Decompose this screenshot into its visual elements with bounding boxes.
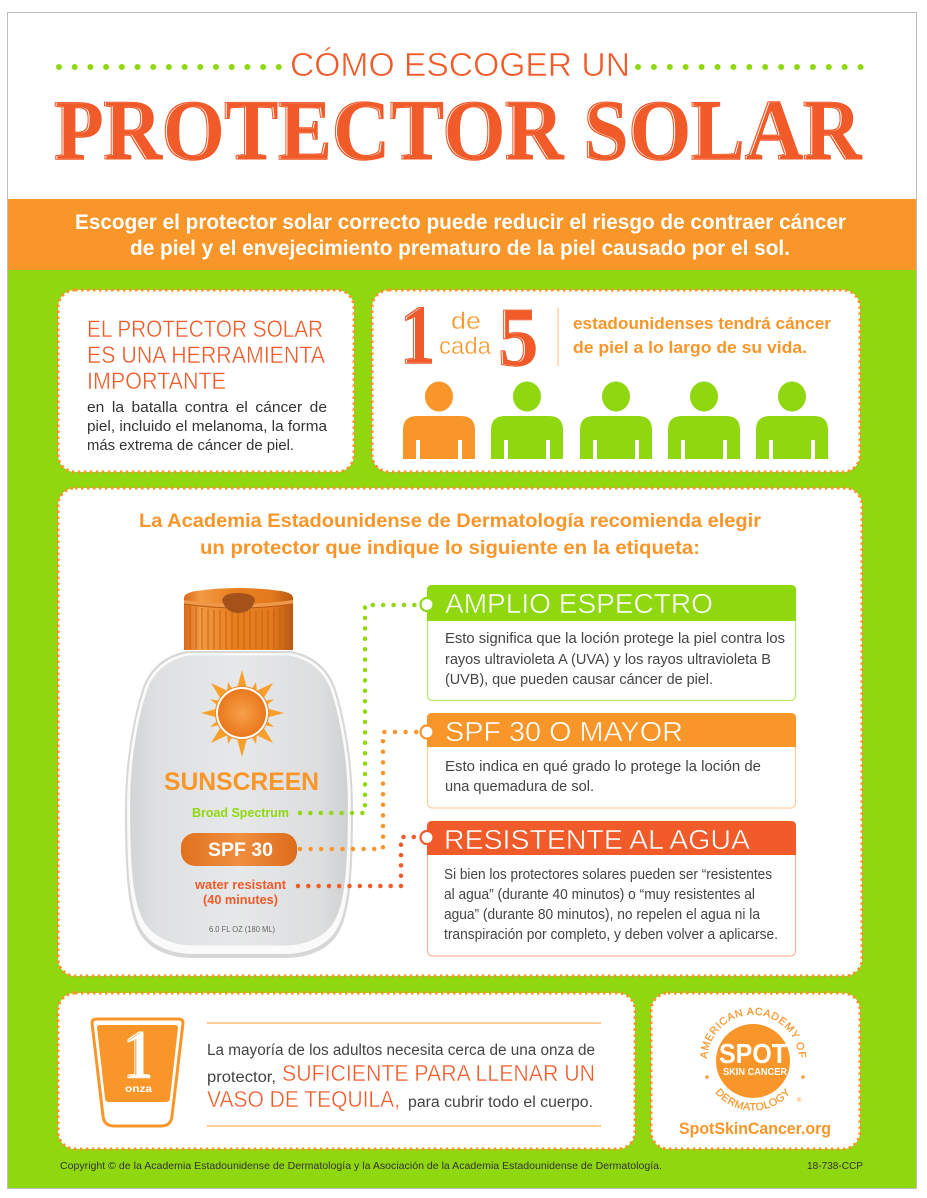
icon: shot glass: onza — [125, 1083, 152, 1095]
panel: recommendation — [58, 488, 862, 976]
intro banner: de piel y el envejecimiento prematuro de la piel causado por el sol. — [130, 237, 790, 260]
title dotted rule right — [638, 64, 861, 70]
intro banner: Escoger el protector solar correcto puede reducir el riesgo de contraer cáncer — [75, 211, 846, 234]
card: amplio espectro: rayos ultravioleta A (UVA) y los rayos ultravioleta B — [445, 652, 771, 668]
card: resistente al agua: transpiración por completo, y deben volver a aplicarse. — [444, 927, 778, 943]
de cada — [439, 308, 492, 360]
bottle body — [125, 651, 353, 958]
one ounce text: protector, — [207, 1069, 276, 1086]
one ounce text: para cubrir todo el cuerpo. — [408, 1094, 593, 1111]
title kicker: CÓMO ESCOGER UN — [290, 46, 630, 83]
bottle label: volume: 6.0 FL OZ (180 ML) — [209, 924, 275, 934]
panel: statistic — [372, 289, 860, 472]
bottle label: water resistant — [194, 878, 287, 907]
statistic text — [573, 314, 831, 357]
bottle label: SPF pill — [181, 833, 297, 866]
icon: orange person — [403, 382, 475, 459]
one ounce text: VASO DE TEQUILA, — [207, 1086, 400, 1112]
card: resistente al agua: agua” (durante 80 minutos), no repelen el agua ni la — [444, 907, 761, 923]
panel heading: ES UNA HERRAMIENTA — [87, 342, 325, 369]
panel: importance — [58, 290, 354, 472]
card: resistente al agua: Si bien los protectores solares pueden ser “resistentes — [444, 867, 772, 883]
de cada: cada — [439, 333, 492, 360]
card: spf 30: SPF 30 O MAYOR — [445, 716, 683, 747]
card: amplio espectro — [420, 585, 796, 700]
icon: sunscreen bottle — [125, 588, 353, 958]
card: resistente al agua: al agua” (durante 40 minutos) o “muy resistentes al — [444, 887, 755, 903]
card: spf 30: una quemadura de sol. — [445, 779, 594, 795]
intro banner — [8, 199, 916, 270]
icon: shot glass — [92, 1017, 183, 1126]
bottle cap — [184, 588, 293, 650]
one ounce text: SUFICIENTE PARA LLENAR UN — [282, 1060, 595, 1086]
icon: green person 5 — [756, 382, 828, 459]
icon: green person 3 — [580, 382, 652, 459]
logo url: SpotSkinCancer.org — [679, 1119, 831, 1138]
icon: green person 2 — [491, 382, 563, 459]
green background — [8, 270, 916, 1188]
connector: red — [298, 837, 418, 886]
panel heading: EL PROTECTOR SOLAR — [87, 316, 323, 343]
logo: spot skin cancer: SPOT — [719, 1038, 787, 1069]
big number 5: 5 — [498, 291, 538, 384]
card: spf 30 — [420, 713, 796, 808]
recommendation heading — [139, 511, 762, 559]
connector: green — [300, 605, 420, 813]
bottle label: water resistant: (40 minutes) — [203, 893, 278, 907]
logo: spot skin cancer: ® — [797, 1097, 802, 1104]
icon: green person 4 — [668, 382, 740, 459]
connector: orange — [300, 732, 418, 849]
document code: 18-738-CCP — [807, 1160, 863, 1172]
bottle label: broad spectrum: Broad Spectrum — [192, 805, 289, 820]
title dotted rule left — [59, 64, 279, 70]
card: amplio espectro: AMPLIO ESPECTRO — [445, 588, 713, 619]
statistic text: estadounidenses tendrá cáncer — [573, 314, 831, 333]
card: amplio espectro: Esto significa que la loción protege la piel contra los — [445, 631, 785, 647]
panel heading: IMPORTANTE — [87, 368, 226, 395]
panel body text: piel, incluido el melanoma, la forma — [87, 419, 328, 435]
card: amplio espectro: (UVB), que pueden causar cáncer de piel. — [445, 672, 713, 688]
panel body text — [87, 400, 328, 454]
de cada: de — [451, 308, 481, 335]
logo: spot skin cancer: AMERICAN ACADEMY OF — [700, 1008, 806, 1059]
panel body text: más extrema de cáncer de piel. — [87, 438, 294, 454]
logo: spot skin cancer: SKIN CANCER — [723, 1066, 787, 1078]
recommendation heading: un protector que indique lo siguiente en la etiqueta: — [200, 538, 700, 559]
panel heading — [87, 316, 325, 395]
card: spf 30: Esto indica en qué grado lo protege la loción de — [445, 759, 761, 775]
main title: PROTECTOR SOLAR — [54, 82, 862, 178]
title block — [54, 46, 862, 178]
one ounce text: La mayoría de los adultos necesita cerca de una onza de — [207, 1042, 595, 1059]
copyright: Copyright © de la Academia Estadounidense de Dermatología y la Asociación de la Academia Estadounidense de Dermatología. — [60, 1160, 662, 1172]
big number 1: 1 — [400, 289, 435, 382]
icon: shot glass: 1 — [123, 1017, 153, 1094]
card: resistente al agua: RESISTENTE AL AGUA — [444, 824, 750, 855]
bottle label: water resistant: water resistant — [194, 878, 287, 892]
panel body text: en la batalla contra el cáncer de — [87, 400, 327, 416]
panel: one ounce — [58, 993, 635, 1149]
card: resistente al agua — [420, 821, 796, 956]
icon: sun — [201, 670, 284, 757]
recommendation heading: La Academia Estadounidense de Dermatología recomienda elegir — [139, 511, 762, 532]
one ounce text — [207, 1042, 595, 1112]
bottle label: SPF pill: SPF 30 — [208, 839, 273, 861]
statistic text: de piel a lo largo de su vida. — [573, 338, 807, 357]
logo: spot skin cancer — [700, 1008, 806, 1111]
panel: logo — [650, 992, 862, 1150]
bottle label: sunscreen: SUNSCREEN — [164, 768, 319, 796]
logo: spot skin cancer: DERMATOLOGY — [716, 1088, 789, 1111]
